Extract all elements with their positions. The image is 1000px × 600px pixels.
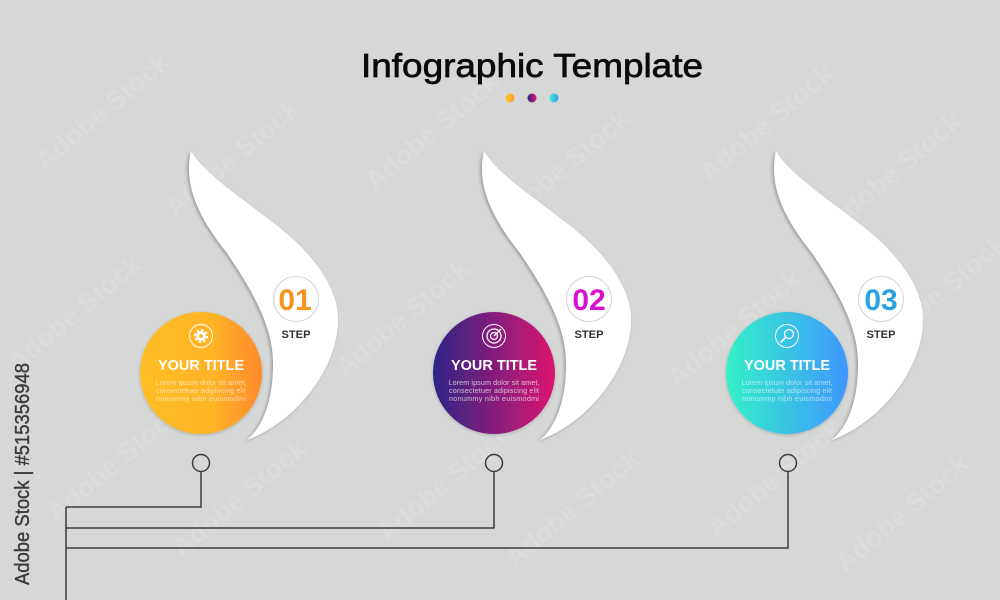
stock id vertical text: Adobe Stock | #515356948 bbox=[12, 363, 34, 585]
title dots bbox=[506, 94, 558, 102]
connector lines bbox=[66, 454, 796, 600]
circle text 2 bbox=[448, 378, 540, 403]
watermark: Adobe Stock bbox=[821, 106, 968, 236]
leaf panel 3 bbox=[774, 151, 923, 440]
watermark: Adobe Stock bbox=[829, 448, 976, 578]
leaf panel 2 bbox=[482, 151, 631, 440]
watermark: Adobe Stock bbox=[693, 58, 840, 188]
circle text 3 bbox=[742, 378, 832, 403]
number badge 01: 01 bbox=[278, 284, 312, 317]
circle text 1: nonummy nibh euismodmi bbox=[156, 394, 246, 403]
watermark: Adobe Stock bbox=[1, 248, 148, 378]
title: Infographic Template bbox=[361, 47, 703, 84]
gradient circle 3 bbox=[726, 312, 848, 434]
icon: gear bbox=[190, 324, 212, 348]
number badge 03: 03 bbox=[864, 284, 898, 317]
watermark: Adobe Stock bbox=[41, 398, 188, 528]
number badge 03 bbox=[858, 276, 904, 322]
step label 2: STEP bbox=[574, 329, 604, 341]
step label 1: STEP bbox=[282, 329, 310, 341]
circle text 2: Lorem ipsum dolor sit amet, bbox=[448, 378, 540, 387]
circle title 3: YOUR TITLE bbox=[744, 358, 830, 374]
watermark: Adobe Stock bbox=[329, 253, 476, 383]
icon: magnifier bbox=[776, 324, 798, 348]
step label 3: STEP bbox=[866, 329, 896, 341]
watermark: Adobe Stock bbox=[359, 66, 506, 196]
step 1 bbox=[140, 151, 338, 440]
circle text 1 bbox=[156, 378, 246, 403]
watermark: Adobe Stock bbox=[661, 263, 808, 393]
gradient circle 1 bbox=[140, 312, 262, 434]
step 2 bbox=[433, 151, 631, 440]
circle text 2: nonummy nibh euismodmi bbox=[449, 394, 539, 403]
icon: target bbox=[482, 324, 506, 348]
circle title 2: YOUR TITLE bbox=[451, 358, 537, 374]
step 3 bbox=[726, 151, 923, 440]
circle text 1: Lorem ipsum dolor sit amet, bbox=[156, 378, 246, 387]
watermark: Adobe Stock bbox=[371, 418, 518, 548]
number badge 02 bbox=[566, 276, 612, 322]
circle text 3: nonummy nibh euismodmi bbox=[742, 394, 832, 403]
watermark: Adobe Stock bbox=[701, 413, 848, 543]
watermark: Adobe Stock bbox=[166, 433, 313, 563]
circle text 1: consectetuer adipiscing elit bbox=[156, 386, 246, 395]
gradient circle 2 bbox=[433, 312, 555, 434]
circle text 3: Lorem ipsum dolor sit amet, bbox=[742, 378, 832, 387]
watermark: Adobe Stock bbox=[499, 443, 646, 573]
circle text 2: consectetuer adipiscing elit bbox=[449, 386, 539, 395]
circle text 3: consectetuer adipiscing elit bbox=[742, 386, 832, 395]
number badge 02: 02 bbox=[572, 284, 606, 317]
circle title 1: YOUR TITLE bbox=[158, 358, 244, 374]
watermark: Adobe Stock bbox=[489, 103, 636, 233]
leaf panel 1 bbox=[189, 151, 338, 440]
number badge 01 bbox=[274, 276, 318, 322]
watermark: Adobe Stock bbox=[29, 46, 176, 176]
watermark: Adobe Stock bbox=[159, 93, 306, 223]
